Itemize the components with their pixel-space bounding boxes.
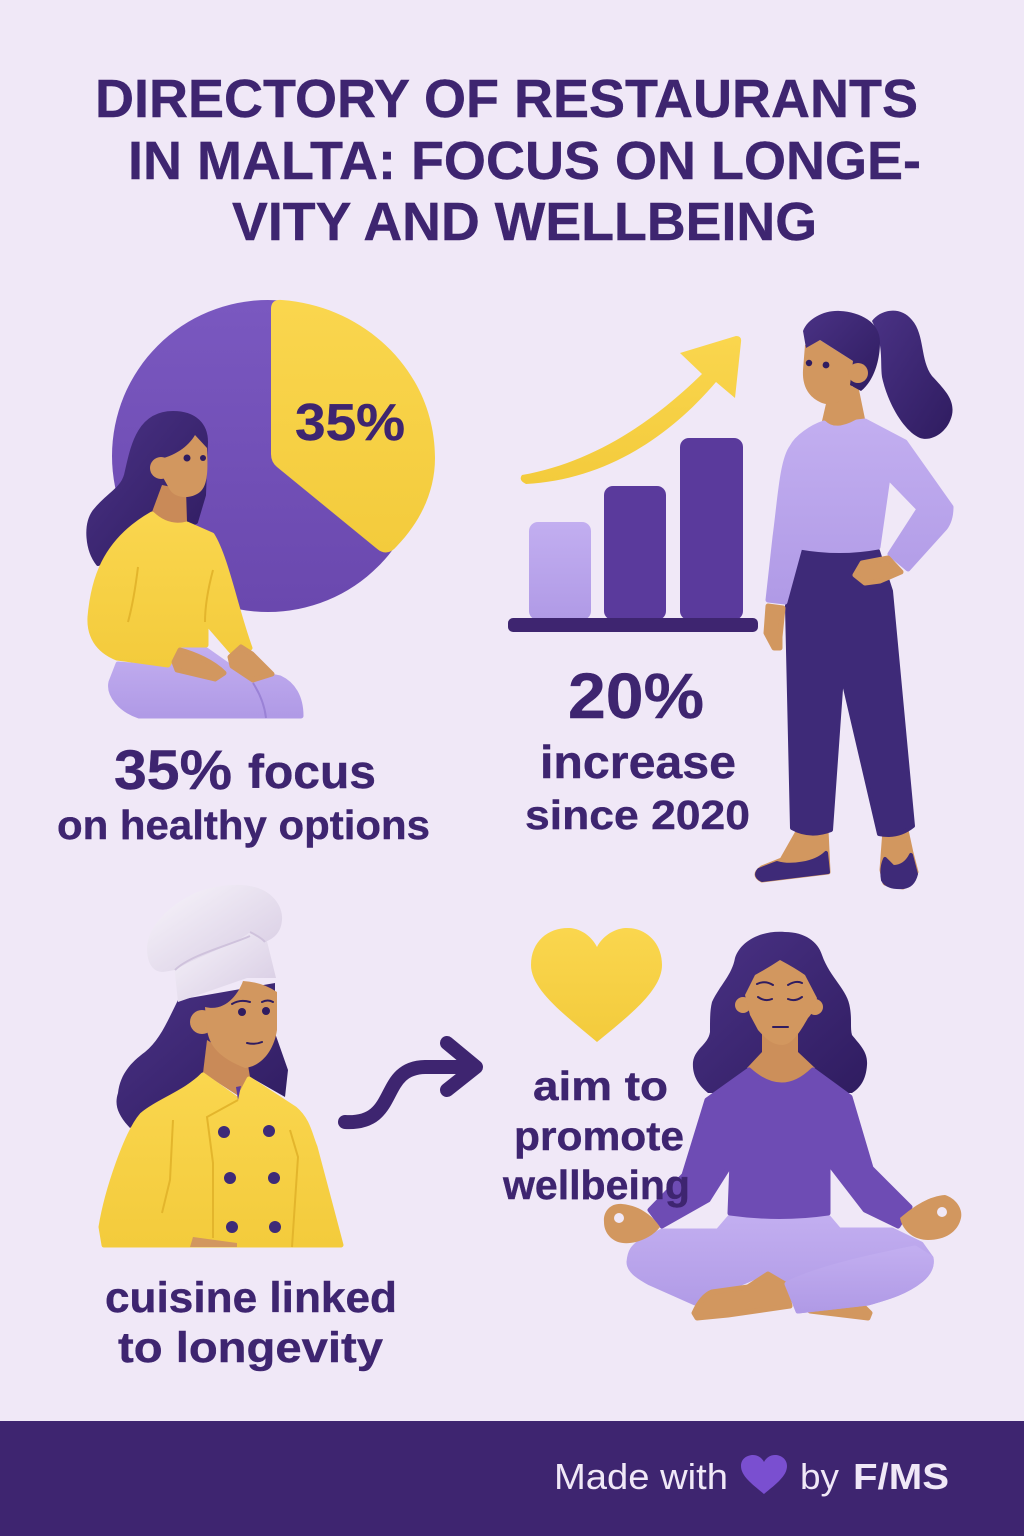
title — [95, 69, 921, 252]
caption: 35% focus: focus — [248, 745, 376, 798]
pie chart — [112, 300, 435, 612]
icon: footer heart — [741, 1455, 787, 1494]
panel: wellbeing — [502, 928, 961, 1318]
caption: 20% increase: since 2020 — [525, 792, 750, 838]
caption: cuisine linked to longevity: cuisine linked — [105, 1274, 397, 1322]
caption: 20% increase: 20% — [568, 660, 704, 732]
caption: 20% increase: increase — [540, 736, 736, 788]
footer credit: by — [800, 1456, 839, 1497]
footer bar — [0, 1421, 1024, 1536]
icon: seated woman in yellow — [88, 413, 301, 718]
caption: 35% focus: 35% — [114, 738, 232, 801]
caption: aim to promote wellbeing: wellbeing — [502, 1162, 690, 1208]
panel: growth — [508, 311, 953, 887]
caption: aim to promote wellbeing — [502, 1063, 690, 1208]
icon: standing woman — [757, 311, 953, 887]
footer credit — [554, 1455, 949, 1497]
caption: 20% increase — [525, 660, 750, 838]
panel: longevity cuisine — [101, 885, 476, 1372]
caption: 35% focus — [57, 738, 430, 848]
title: IN MALTA: FOCUS ON LONGE- — [128, 131, 921, 191]
caption: cuisine linked to longevity — [105, 1274, 397, 1372]
title: VITY AND WELLBEING — [232, 192, 817, 252]
title: DIRECTORY OF RESTAURANTS — [95, 69, 918, 129]
icon: curved arrow — [345, 1043, 476, 1122]
icon: rising arrow — [521, 336, 741, 484]
pie chart: 35% — [295, 394, 405, 452]
caption: 35% focus: on healthy options — [57, 802, 430, 848]
icon: chef — [101, 885, 341, 1247]
icon: heart — [531, 928, 662, 1042]
caption: cuisine linked to longevity: to longevity — [118, 1324, 383, 1372]
icon: meditating woman — [604, 932, 961, 1318]
footer credit: Made with — [554, 1456, 728, 1497]
bar chart — [508, 438, 758, 632]
panel: healthy options — [57, 300, 435, 848]
footer credit: F/MS — [853, 1456, 949, 1497]
caption: aim to promote wellbeing: aim to — [533, 1063, 668, 1109]
caption: aim to promote wellbeing: promote — [514, 1113, 684, 1159]
